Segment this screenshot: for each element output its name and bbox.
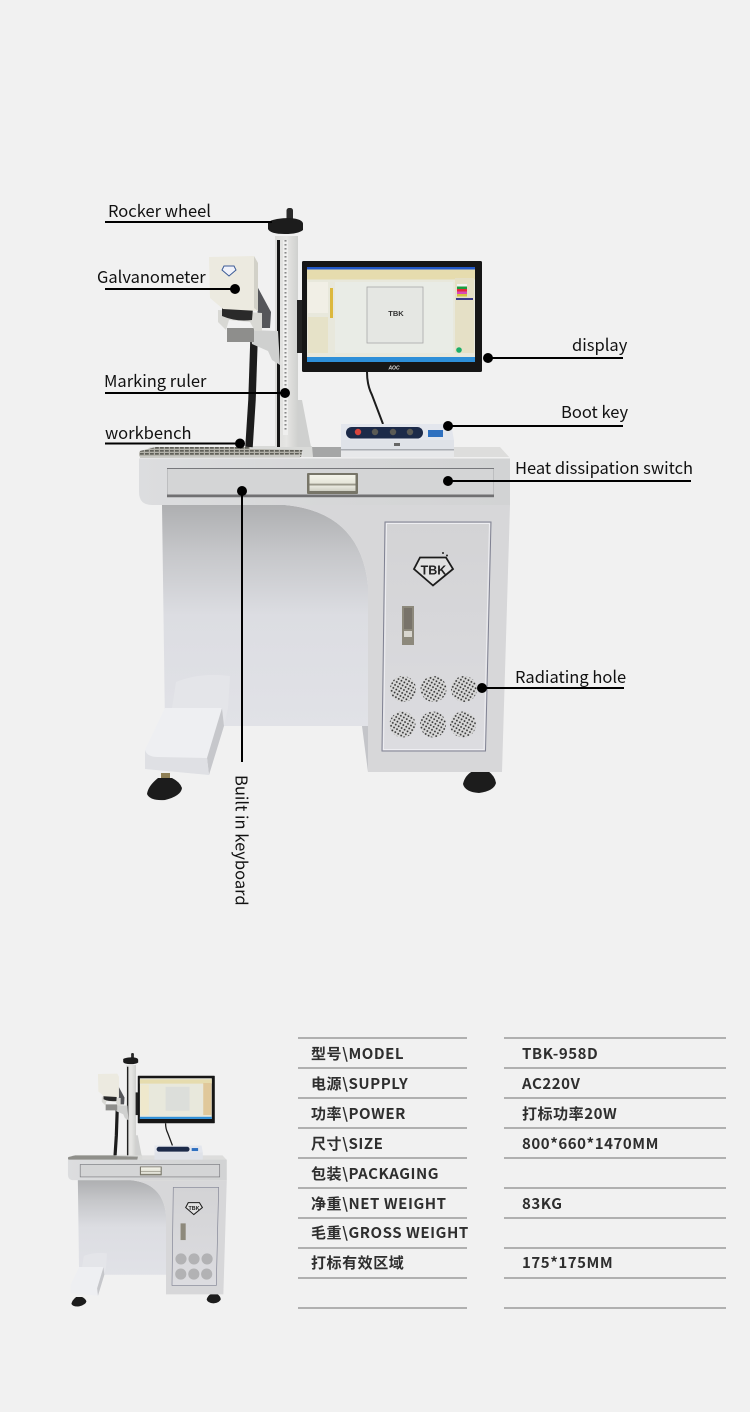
column black stripe — [277, 240, 280, 447]
canvas area — [335, 282, 453, 353]
callout: Heat dissipation switch — [443, 455, 693, 486]
monitor — [302, 261, 482, 372]
radiating holes — [390, 676, 477, 738]
recessed back panel — [162, 505, 368, 726]
head bracket frame — [218, 310, 262, 331]
box side shade — [254, 256, 258, 311]
row labels: 毛重\GROSS WEIGHT — [311, 1222, 469, 1243]
cable — [249, 340, 254, 447]
green button — [456, 347, 462, 353]
colour palette — [456, 284, 473, 300]
row labels: 净重\NET WEIGHT — [311, 1193, 447, 1214]
machine: small product thumbnail: TBK — [189, 1206, 200, 1212]
keyboard tray / foot pedal — [145, 675, 230, 775]
callout: Built in keyboard: Built in keyboard — [230, 775, 254, 906]
artboard — [367, 287, 423, 343]
right panel — [455, 278, 474, 353]
left panel upper — [308, 282, 328, 313]
row labels: 电源\SUPPLY — [311, 1073, 408, 1094]
callout: Boot key — [443, 399, 628, 431]
monitor brand: AOC — [387, 366, 400, 372]
callout: workbench — [105, 420, 245, 448]
machine: small product thumbnail — [68, 1053, 227, 1306]
row values: 800*660*1470MM — [522, 1133, 659, 1154]
tool strip — [330, 288, 333, 318]
workbench grid plate — [139, 447, 303, 458]
row values: AC220V — [521, 1073, 581, 1094]
callout: workbench: workbench — [105, 420, 192, 444]
table top highlight — [139, 457, 510, 458]
callout: Radiating hole: Radiating hole — [515, 664, 626, 688]
column — [275, 236, 298, 447]
head mount block — [227, 328, 254, 342]
left column rules — [298, 1037, 467, 1309]
cabinet door — [382, 522, 491, 751]
row values — [521, 1043, 659, 1273]
row values: 打标功率20W — [522, 1103, 617, 1124]
control box — [341, 424, 454, 458]
drawer — [167, 468, 494, 498]
row labels: 功率\POWER — [311, 1103, 406, 1124]
callout: Boot key: Boot key — [561, 399, 628, 423]
row labels: 打标有效区域 — [311, 1252, 404, 1273]
row values: 83KG — [522, 1193, 563, 1214]
rocker wheel — [268, 208, 303, 234]
column base plate — [250, 446, 313, 457]
laser head rear body — [257, 286, 271, 328]
row labels — [311, 1043, 469, 1273]
screen toolbar — [307, 270, 475, 280]
drawer handle — [307, 473, 358, 494]
callout: Marking ruler: Marking ruler — [104, 368, 207, 392]
foot: left — [147, 773, 182, 800]
surface shadow behind column — [312, 447, 342, 457]
callout: Rocker wheel: Rocker wheel — [108, 198, 211, 222]
left panel lower — [308, 317, 328, 353]
foot: right — [463, 768, 496, 793]
row values: TBK-958D — [522, 1043, 598, 1064]
logo: TBK diamond: TBK — [421, 564, 446, 578]
callout: Radiating hole — [477, 664, 626, 693]
callout: Heat dissipation switch: Heat dissipation switch — [515, 455, 693, 479]
callout: Galvanometer — [97, 264, 240, 294]
callout: Built in keyboard — [230, 486, 254, 906]
spec table: left column — [298, 1037, 469, 1309]
callout: Galvanometer: Galvanometer — [97, 264, 206, 288]
cabinet front — [285, 505, 510, 772]
screen title bar — [307, 267, 475, 270]
row values: 175*175MM — [522, 1252, 613, 1273]
row labels: 型号\MODEL — [311, 1043, 404, 1064]
galvanometer lens — [222, 304, 253, 320]
monitor mount — [297, 300, 303, 353]
callout: display: display — [572, 332, 628, 356]
head arm bracket — [250, 330, 280, 365]
ruler strip — [283, 240, 288, 435]
screen — [307, 267, 475, 362]
cabinet left edge shade — [362, 726, 368, 772]
table top surface — [139, 447, 510, 458]
machine: laser marking machine, main photo — [139, 208, 510, 800]
column base flare — [298, 400, 311, 447]
callout: Marking ruler — [104, 368, 290, 398]
callout: display — [483, 332, 628, 363]
galvanometer box — [209, 256, 258, 311]
table top block — [139, 457, 510, 505]
screen logo text: TBK — [388, 309, 404, 318]
row labels: 包装\PACKAGING — [311, 1163, 439, 1184]
door lock — [402, 606, 414, 645]
logo: TBK diamond — [414, 552, 453, 586]
taskbar — [307, 357, 475, 362]
galvanometer logo — [222, 266, 236, 276]
ruler scale — [284, 240, 286, 432]
row labels: 尺寸\SIZE — [311, 1133, 383, 1154]
monitor cable — [367, 372, 383, 424]
right column rules — [504, 1037, 726, 1309]
spec table: right column — [504, 1037, 726, 1309]
